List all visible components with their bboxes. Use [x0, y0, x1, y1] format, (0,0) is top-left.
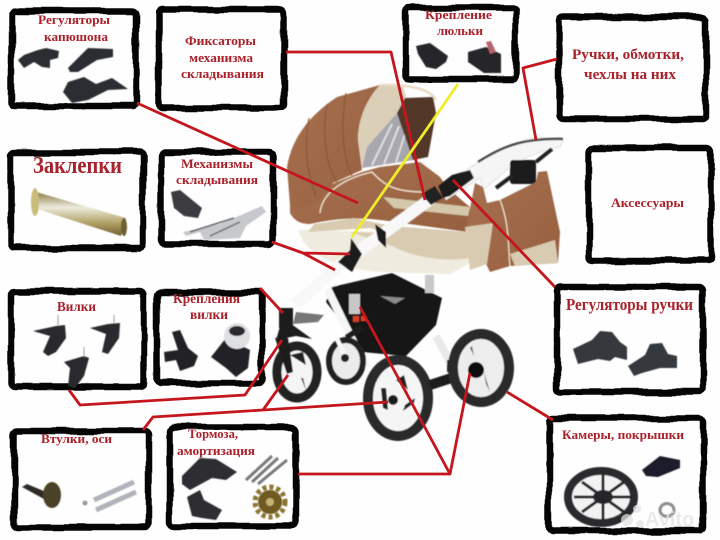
heading: cot mount — [425, 7, 492, 38]
icon: tyre wheel — [568, 471, 634, 523]
frame: fork mounts — [157, 292, 262, 383]
heading: folding locks: механизма — [189, 50, 254, 65]
heading: handle adjusters: Регуляторы ручки — [566, 295, 693, 314]
rear right wheel — [453, 334, 509, 402]
heading: cot mount: люльки — [437, 23, 483, 38]
heading: brakes — [177, 426, 255, 458]
frame: handles — [559, 17, 706, 119]
heading: brakes: Тормоза, — [188, 426, 238, 441]
frame: bushings — [14, 431, 149, 527]
labels — [33, 7, 693, 458]
icon: gear — [255, 487, 285, 517]
heading: folding locks: Фиксаторы — [185, 33, 256, 48]
connector: cot mount yellow line — [352, 84, 458, 237]
heading: hood adjusters — [38, 12, 110, 44]
connector: tubes and tyres — [507, 392, 553, 420]
rear left wheel — [368, 360, 428, 436]
heading: folding mechanisms: Механизмы — [181, 156, 253, 171]
icon: inner tube — [642, 456, 680, 477]
front left wheel — [275, 308, 317, 398]
heading: fork mounts: Крепления — [173, 292, 240, 307]
carrycot body — [290, 162, 472, 274]
heading: fork mounts: вилки — [190, 308, 228, 323]
connector: folding mechanisms — [272, 242, 350, 270]
heading: brakes: амортизация — [177, 443, 255, 458]
carrycot hood — [287, 85, 436, 210]
frame: accessories — [589, 148, 711, 261]
heading: hood adjusters: капюшона — [44, 29, 109, 44]
icon: axles — [82, 482, 136, 510]
frame: hood adjusters — [12, 11, 136, 106]
frame: tubes and tyres — [549, 418, 703, 531]
icon: cot mounts — [416, 41, 501, 73]
connector: bushings and axles — [143, 375, 388, 430]
icon: bushing — [22, 482, 61, 508]
rear axle — [430, 360, 476, 385]
basket — [293, 273, 452, 368]
icon: folding mechanism — [171, 190, 266, 240]
heading: handles: чехлы на них — [584, 67, 677, 83]
heading: handles: Ручки, обмотки, — [572, 47, 684, 63]
heading: folding mechanisms: складывания — [176, 172, 258, 187]
bag — [465, 171, 560, 272]
connector: fork mounts — [260, 288, 283, 313]
heading: fork mounts — [173, 292, 240, 323]
frame: brakes — [170, 427, 296, 526]
icon: handle adjusters — [573, 331, 677, 376]
heading: accessories: Аксессуары — [611, 195, 684, 210]
frame — [295, 186, 443, 366]
icon: forks — [33, 315, 120, 388]
connector: brakes and suspension — [298, 307, 470, 474]
heading: forks: Вилки — [57, 300, 96, 315]
watermark: Avito: Avito — [645, 509, 694, 531]
heading: rivets: Заклепки — [33, 153, 122, 179]
icon: shock rods — [246, 456, 287, 484]
frame: cot mount — [406, 8, 516, 79]
icon: bearing — [660, 504, 674, 516]
icon: rivet — [31, 188, 127, 236]
heading: folding locks — [181, 33, 264, 81]
icon: hood adjusters — [18, 48, 128, 103]
icon: brake parts — [182, 458, 237, 520]
frame: rivets — [11, 152, 143, 248]
frame: folding mechanisms — [161, 152, 273, 244]
heading: folding locks: складывания — [181, 66, 264, 81]
frame: folding locks — [159, 10, 284, 108]
connector: forks — [69, 340, 282, 405]
connector: hood adjusters — [137, 103, 358, 203]
connector: folding locks — [286, 52, 425, 200]
heading: folding mechanisms — [176, 156, 258, 187]
icon: fork mounts — [164, 323, 250, 377]
heading: handles — [572, 47, 684, 83]
heading: bushings: Втулки, оси — [41, 431, 113, 446]
connector: handle wraps — [523, 59, 557, 140]
watermark: Avito — [621, 505, 694, 531]
connector lines — [69, 52, 557, 474]
heading: cot mount: Крепление — [425, 7, 492, 22]
frame: handle adjusters — [557, 287, 703, 392]
heading: tubes and tyres: Камеры, покрышки — [562, 427, 685, 442]
stroller illustration — [275, 85, 563, 436]
front right wheel — [329, 336, 363, 382]
heading: hood adjusters: Регуляторы — [38, 12, 110, 27]
frame: forks — [11, 291, 144, 387]
connector: handle adjusters — [453, 180, 555, 287]
handle bar — [438, 137, 563, 200]
